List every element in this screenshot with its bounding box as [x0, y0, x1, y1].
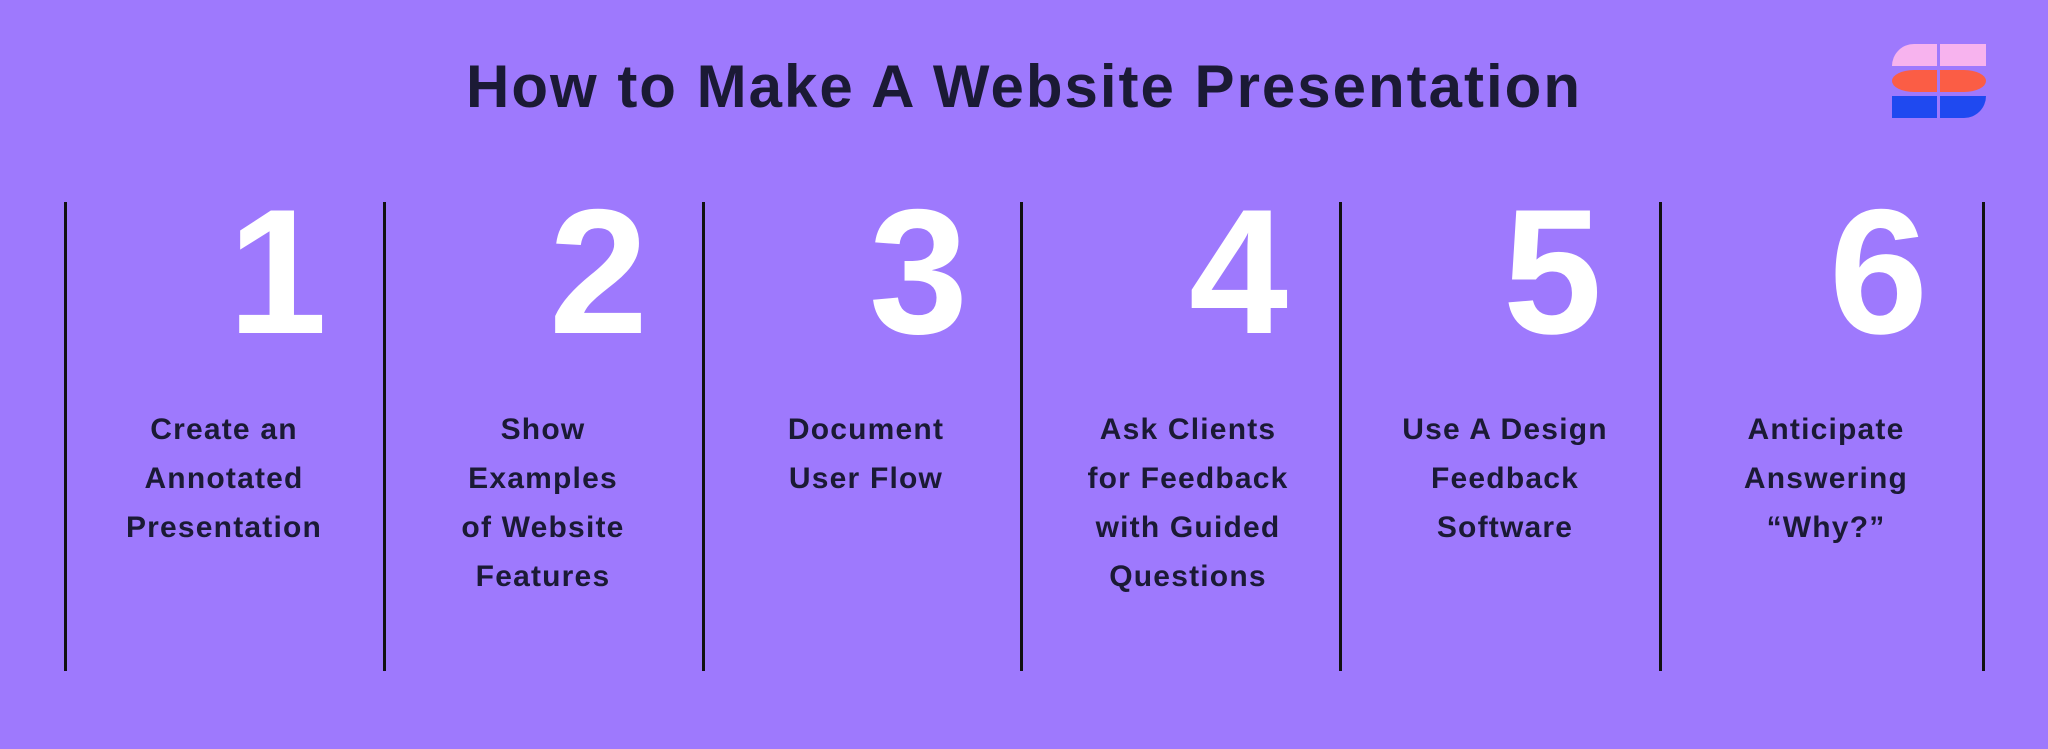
text: with Guided: [1096, 511, 1280, 544]
text: 2: [549, 172, 648, 371]
text: “Why?”: [1767, 511, 1885, 544]
text: Examples: [468, 462, 618, 495]
text: Presentation: [126, 511, 322, 544]
step 1: [126, 172, 327, 544]
text: Show: [501, 413, 585, 446]
text: User Flow: [789, 462, 943, 495]
text: for Feedback: [1087, 462, 1289, 495]
text: 5: [1503, 172, 1602, 371]
title: How to Make A Website Presentation: [466, 53, 1582, 120]
text: Use A Design: [1402, 413, 1608, 446]
text: Features: [476, 560, 610, 593]
step 2: [461, 172, 648, 593]
step 6: [1744, 172, 1928, 544]
text: 4: [1189, 172, 1288, 371]
text: 1: [228, 172, 327, 371]
text: Anticipate: [1747, 413, 1905, 446]
text: Annotated: [144, 462, 304, 495]
text: Document: [788, 413, 944, 446]
step 5: [1402, 172, 1608, 544]
text: Answering: [1744, 462, 1908, 495]
text: Questions: [1109, 560, 1267, 593]
text: Feedback: [1431, 462, 1579, 495]
text: Ask Clients: [1100, 413, 1276, 446]
step 4: [1087, 172, 1289, 593]
text: Create an: [150, 413, 298, 446]
icon: logo: [1892, 44, 1986, 118]
step 3: [788, 172, 968, 495]
text: of Website: [461, 511, 625, 544]
text: 6: [1829, 172, 1928, 371]
text: 3: [869, 172, 968, 371]
text: Software: [1437, 511, 1573, 544]
